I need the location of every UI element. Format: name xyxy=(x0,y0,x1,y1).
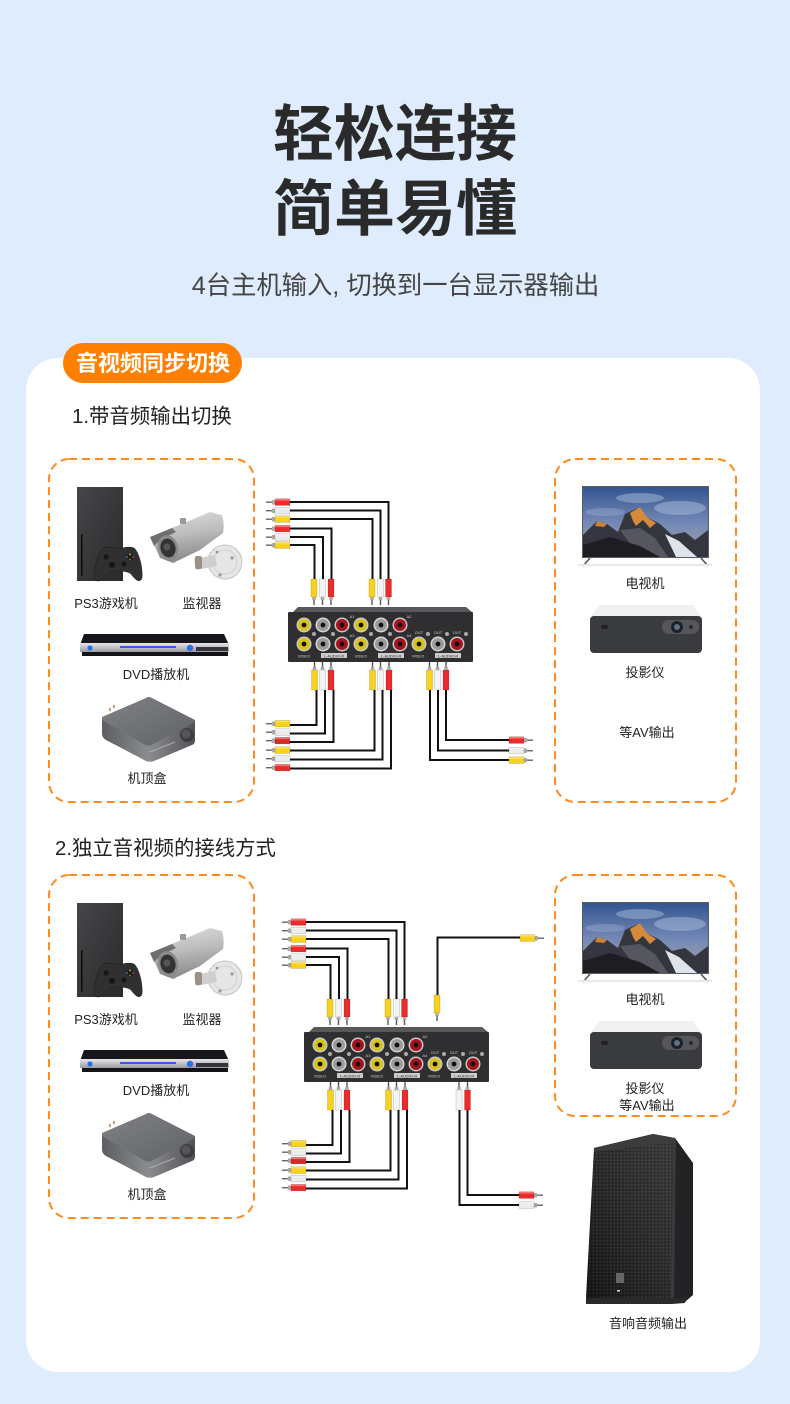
icon: TV xyxy=(578,902,712,982)
label: other AV outputs: 等AV输出 xyxy=(619,1098,675,1113)
tag: sync switching: 音视频同步切换 xyxy=(76,351,230,376)
label: other AV outputs: 等AV输出 xyxy=(619,725,675,740)
panel: main card xyxy=(26,358,760,1372)
heading: section 1: 1.带音频输出切换 xyxy=(72,405,232,428)
label: projector: 投影仪 xyxy=(625,1081,665,1096)
label: speaker audio output: 音响音频输出 xyxy=(609,1316,687,1331)
label: TV: 电视机 xyxy=(625,576,665,591)
title xyxy=(273,100,517,243)
video output cable xyxy=(434,935,544,1021)
input cables bottom xyxy=(266,662,392,771)
AV switch box xyxy=(304,1027,489,1082)
icon: TV xyxy=(578,486,712,566)
audio output cables xyxy=(456,1082,543,1208)
diagram: section 1 wiring xyxy=(266,499,533,771)
label: projector: 投影仪 xyxy=(625,665,665,680)
AV switch box xyxy=(288,607,473,662)
input cables bottom xyxy=(282,1082,408,1191)
title: 轻松连接 xyxy=(273,100,517,168)
icon: speaker xyxy=(586,1134,693,1304)
panel: section 2 sources xyxy=(49,875,254,1218)
subtitle: 4台主机输入, 切换到一台显示器输出 xyxy=(192,272,599,300)
icon: projector xyxy=(590,605,702,653)
panel: section 1 sources xyxy=(49,459,254,802)
tag: sync switching xyxy=(63,343,242,383)
diagram: section 2 wiring xyxy=(282,919,544,1208)
input cables top xyxy=(266,499,392,605)
panel: section 1 outputs xyxy=(555,459,736,802)
label: TV: 电视机 xyxy=(625,992,665,1007)
icon: projector xyxy=(590,1021,702,1069)
input cables top xyxy=(282,919,408,1025)
panel: section 2 outputs xyxy=(555,875,736,1116)
heading: section 2: 2.独立音视频的接线方式 xyxy=(55,837,276,860)
output cables xyxy=(426,662,533,763)
title: 简单易懂 xyxy=(273,175,517,243)
